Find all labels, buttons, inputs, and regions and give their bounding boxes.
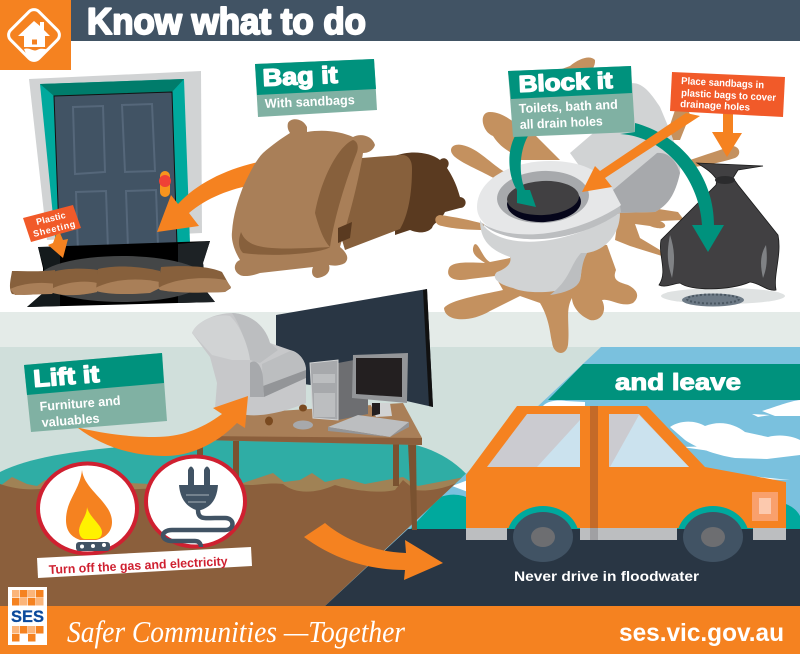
front window [609, 414, 689, 467]
door frame [40, 79, 190, 267]
heading: Bag it: Bag it [262, 62, 338, 92]
sills [466, 528, 507, 540]
door surround [29, 71, 202, 240]
sandbag pile [232, 59, 466, 278]
arrow: toward car [304, 523, 443, 580]
teal hill, right [410, 494, 800, 529]
toilet tank [570, 83, 680, 213]
drain [682, 294, 744, 306]
rear window [487, 414, 580, 467]
heading: Lift it: Lift it [32, 361, 100, 393]
door pillar [590, 406, 598, 529]
arrow: to bag [712, 113, 742, 157]
heading: Block it: all drain holes [519, 113, 603, 132]
arrow: to door [157, 159, 274, 232]
icon: flooded house badge [0, 0, 71, 70]
heading: Lift it: valuables [41, 410, 100, 430]
car body [466, 406, 786, 528]
table legs [233, 441, 239, 481]
heading: and leave [548, 364, 800, 400]
middle sandbag [330, 155, 412, 250]
SES logo [8, 587, 47, 645]
callout: place sandbags: Place sandbags in [681, 76, 764, 91]
car [466, 406, 786, 568]
arrow: to toilet [582, 113, 700, 192]
furniture on table [192, 289, 433, 530]
heading: Lift it [24, 353, 167, 432]
road [325, 529, 800, 606]
heading: Lift it: Furniture and [39, 393, 121, 414]
arrow: lift up to table [78, 396, 248, 456]
title: Know what to do [87, 1, 366, 42]
toilet bowl [480, 213, 620, 292]
callout: turn off gas and electricity [37, 547, 252, 578]
big screen [276, 289, 433, 407]
muddy floodwater [0, 473, 470, 606]
icon: gas flame [38, 464, 137, 554]
callout: plastic sheeting: Sheeting [32, 219, 76, 239]
wheels [513, 512, 573, 562]
PC tower [310, 360, 368, 420]
black bag [659, 163, 779, 290]
front sandbag [232, 119, 375, 278]
tagline: Safer Communities —Together [67, 614, 406, 649]
heading: and leave: and leave [615, 369, 741, 395]
sandbags at door [10, 266, 231, 295]
SES logo: SES [11, 608, 44, 626]
heading: Bag it: With sandbags [264, 92, 355, 111]
plastic sheeting [27, 241, 215, 307]
door handle [160, 171, 170, 197]
mouse [293, 420, 313, 430]
computer monitor [352, 353, 408, 417]
heading: Bag it [255, 59, 377, 117]
door scene [10, 71, 274, 307]
keyboard [328, 415, 409, 437]
website: ses.vic.gov.au [619, 619, 784, 647]
teal floodwater, left [0, 437, 470, 520]
drain plug [506, 182, 582, 224]
icon: electric plug [146, 456, 245, 547]
heading: Block it: Toilets, bath and [518, 97, 618, 116]
table top [200, 403, 422, 445]
arrow: into toilet [509, 136, 536, 207]
toilet seat [477, 161, 621, 238]
caption: never drive: Never drive in floodwater [514, 569, 700, 584]
callout: place sandbags: drainage holes [680, 99, 751, 114]
armchair [192, 313, 307, 426]
callout: place sandbags: plastic bags to cover [681, 88, 776, 104]
wheel arches [508, 506, 748, 528]
heading: Block it: Block it [518, 67, 614, 97]
door [54, 92, 177, 258]
callout: plastic sheeting: Plastic [35, 210, 67, 227]
back sandbag [395, 153, 466, 235]
arrow: into bag [620, 123, 724, 252]
callout: place sandbags [582, 72, 785, 192]
sky and clouds [325, 347, 800, 606]
header bar [71, 0, 800, 42]
callout: plastic sheeting [23, 205, 81, 242]
headlight [752, 492, 778, 521]
heading: Block it [508, 66, 635, 137]
callout: turn off gas and electricity: Turn off the gas and electricity [48, 554, 228, 577]
arrow: to plastic sheeting [48, 233, 68, 258]
rubbish bag over drain [659, 163, 785, 306]
toilet [477, 83, 680, 295]
splash of muddy water [435, 58, 739, 353]
footer bar [0, 606, 800, 654]
